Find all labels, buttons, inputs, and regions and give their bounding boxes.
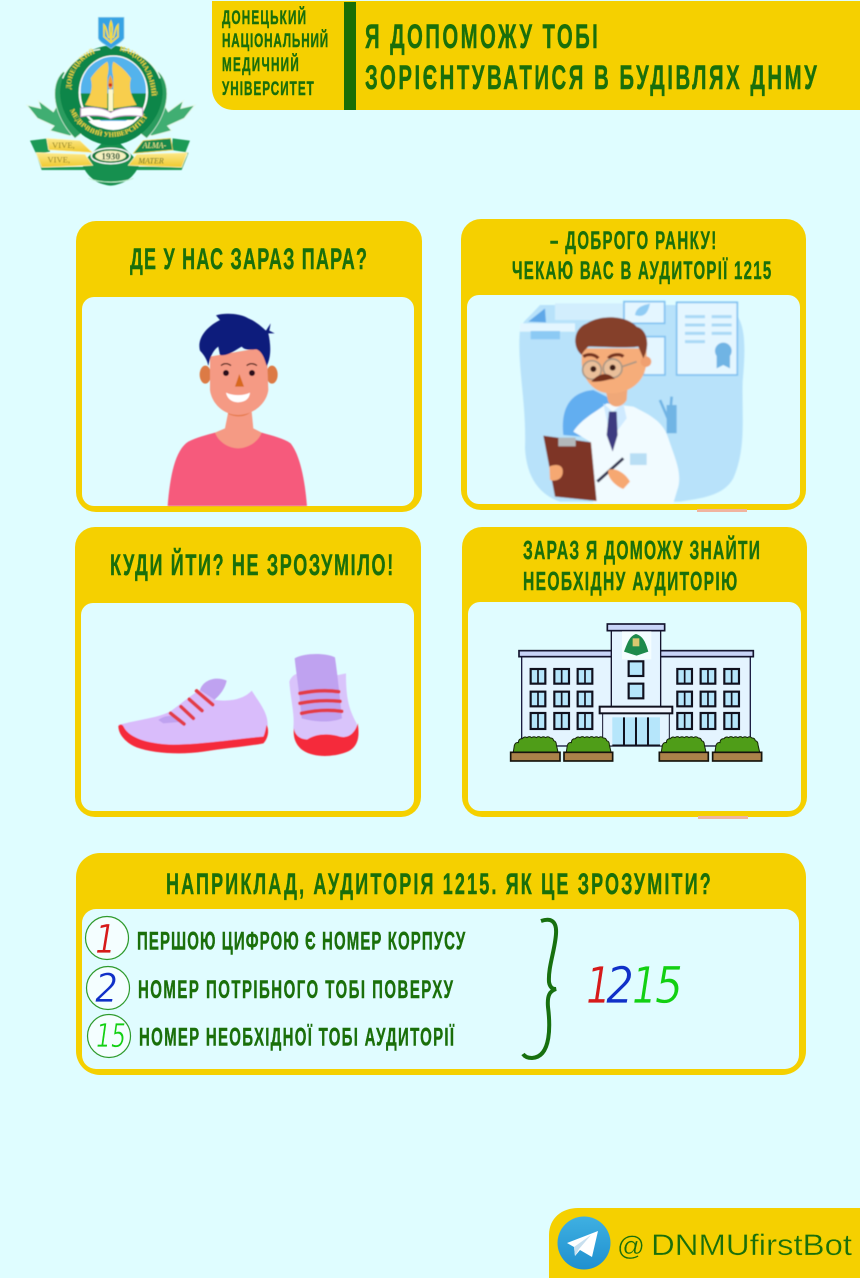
heading: teacher greeting <box>512 227 771 285</box>
header banner <box>212 1 860 110</box>
emblem ribbons with motto: MATER <box>137 156 164 165</box>
main title <box>365 18 817 96</box>
icon: telegram logo <box>558 1216 610 1270</box>
emblem ribbons with motto: VIVE, <box>47 155 70 165</box>
emblem shield with trident <box>98 17 124 49</box>
item: room number: НОМЕР НЕОБХІДНОЇ ТОБІ АУДИТОРІЇ <box>139 1024 455 1052</box>
heading: help finding the room: НЕОБХІДНУ АУДИТОРІЮ <box>523 567 737 596</box>
panel: find the room <box>462 527 807 819</box>
icon: university building <box>511 624 762 761</box>
number 1215 coloured by digit: 1 <box>632 957 657 1016</box>
emblem ribbons with motto: ALMA- <box>142 141 167 150</box>
emblem curved lettering: МЕДИЧНИЙ УНІВЕРСИТЕТ <box>69 108 148 138</box>
panel: telegram bot <box>549 1208 860 1278</box>
small pink mark <box>698 816 748 819</box>
heading: teacher greeting: ЧЕКАЮ ВАС В АУДИТОРІЇ 1215 <box>512 257 771 285</box>
item: first digit building: ПЕРШОЮ ЦИФРОЮ Є НОМЕР КОРПУСУ <box>137 928 466 956</box>
emblem year badge: 1930 <box>101 152 120 162</box>
item: floor number <box>86 966 454 1012</box>
emblem curved lettering: НАЦІОНАЛЬНИЙ <box>118 46 159 97</box>
icon: doctor with clipboard <box>519 302 744 503</box>
emblem laurel leaves <box>27 72 195 186</box>
heading: help finding the room: ЗАРАЗ Я ДОМОЖУ ЗНАЙТИ <box>523 535 760 565</box>
item: first digit building <box>86 916 466 963</box>
number 1215 coloured by digit: 1 <box>586 957 611 1016</box>
emblem curved lettering <box>65 46 159 138</box>
university name: ДОНЕЦЬКИЙ <box>222 6 306 29</box>
emblem: university crest <box>26 16 196 186</box>
university name <box>222 6 328 100</box>
university name: НАЦІОНАЛЬНИЙ <box>222 29 328 52</box>
curly brace <box>523 920 556 1058</box>
emblem ribbons with motto <box>36 138 187 167</box>
university name: МЕДИЧНИЙ <box>222 53 299 76</box>
emblem ribbons with motto: VIVE, <box>52 140 75 150</box>
panel: where to go <box>75 527 421 817</box>
item: first digit building: 1 <box>95 917 116 963</box>
item: floor number: НОМЕР ПОТРІБНОГО ТОБІ ПОВЕРХУ <box>138 976 454 1004</box>
text: bot handle: DNMUfirstBot <box>651 1229 853 1262</box>
panel: room number example <box>76 853 806 1075</box>
main title: Я ДОПОМОЖУ ТОБІ <box>365 18 598 55</box>
icon: pair of sneakers <box>118 654 359 756</box>
number 1215 coloured by digit: 5 <box>655 957 683 1016</box>
heading: example room 1215: НАПРИКЛАД, АУДИТОРІЯ 1215. ЯК ЦЕ ЗРОЗУМІТИ? <box>166 869 711 901</box>
emblem curved lettering: ДОНЕЦЬКИЙ <box>65 48 96 90</box>
icon: smiling student <box>168 314 307 506</box>
main title: ЗОРІЄНТУВАТИСЯ В БУДІВЛЯХ ДНМУ <box>365 59 817 96</box>
university name: УНІВЕРСИТЕТ <box>222 78 314 100</box>
emblem main oval <box>60 45 163 145</box>
item: room number <box>88 1014 455 1058</box>
emblem year badge <box>91 148 130 164</box>
item: room number: 15 <box>96 1016 126 1055</box>
heading: teacher greeting: – ДОБРОГО РАНКУ! <box>550 227 716 255</box>
heading: where is the class: ДЕ У НАС ЗАРАЗ ПАРА? <box>130 244 367 276</box>
number 1215 coloured by digit <box>586 957 683 1016</box>
heading: confusion: КУДИ ЙТИ? НЕ ЗРОЗУМІЛО! <box>110 548 393 582</box>
panel: student question <box>76 221 422 512</box>
heading: help finding the room <box>523 535 760 596</box>
panel: teacher reply <box>461 219 806 512</box>
text: bot handle: @ <box>617 1231 645 1261</box>
number 1215 coloured by digit: 2 <box>606 957 634 1016</box>
item: floor number: 2 <box>95 966 118 1012</box>
small pink mark <box>697 509 747 512</box>
